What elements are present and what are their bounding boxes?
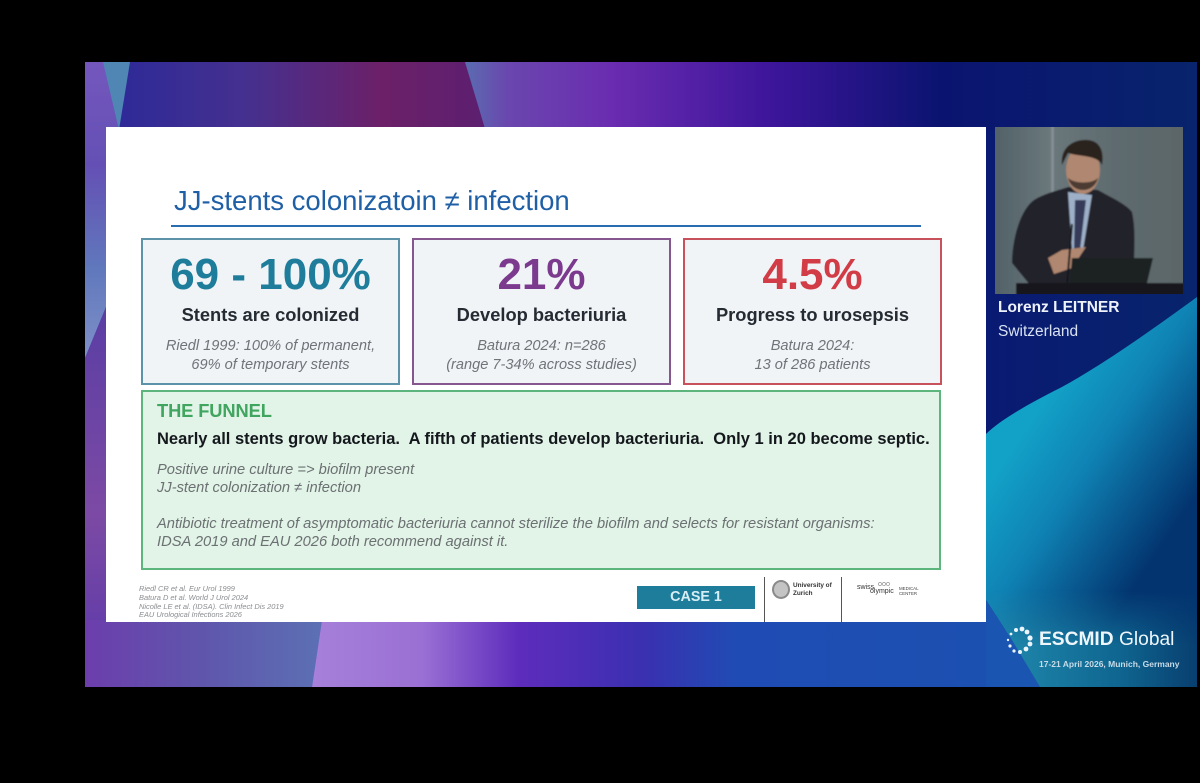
panel: stents colonized: 69% of temporary stents <box>191 356 350 372</box>
funnel note two: Antibiotic treatment of asymptomatic bacteriuria cannot sterilize the biofilm and selects for resistant organisms: <box>157 516 875 532</box>
speaker body <box>1012 187 1134 285</box>
funnel summary: Nearly all stents grow bacteria. A fifth of patients develop bacteriuria. Only 1 in 20 become septic. <box>157 430 930 448</box>
panel: urosepsis: Batura 2024: <box>771 338 854 354</box>
case label <box>637 586 755 609</box>
panel: bacteriuria: (range 7-34% across studies) <box>446 356 637 372</box>
references <box>139 584 284 619</box>
olympic rings <box>878 582 890 586</box>
medical center name <box>899 586 919 596</box>
microphone <box>1067 224 1072 285</box>
ESCMID wordmark: ESCMID Global <box>1039 629 1174 650</box>
laptop <box>1070 258 1153 283</box>
panel: urosepsis: Progress to urosepsis <box>716 304 909 325</box>
speaker country: Switzerland <box>998 323 1078 340</box>
references: EAU Urological Infections 2026 <box>139 610 242 619</box>
slide title: JJ-stents colonizatoin ≠ infection <box>174 185 570 216</box>
funnel note one: JJ-stent colonization ≠ infection <box>157 480 361 496</box>
panel: bacteriuria: Batura 2024: n=286 <box>477 338 606 354</box>
speaker head <box>1066 146 1100 194</box>
panel: bacteriuria: Develop bacteriuria <box>457 304 626 325</box>
conference backdrop <box>85 62 1197 687</box>
funnel note two: IDSA 2019 and EAU 2026 both recommend against it. <box>157 534 508 550</box>
conference date and place: 17-21 April 2026, Munich, Germany <box>1039 659 1179 669</box>
case label: CASE 1 <box>670 589 722 605</box>
left strip <box>85 62 119 358</box>
funnel note two <box>156 516 875 550</box>
logo: University of Zurich <box>772 580 832 599</box>
olympic name: olympic <box>870 588 894 595</box>
university name <box>793 582 832 596</box>
panel: stents colonized: Stents are colonized <box>182 304 359 325</box>
bottom band <box>85 620 322 687</box>
university name: University of <box>793 582 832 589</box>
icon: university seal <box>772 580 790 599</box>
funnel note one: Positive urine culture => biofilm present <box>157 462 414 478</box>
footer divider left <box>764 577 765 622</box>
lectern <box>1016 283 1188 299</box>
panel: the funnel <box>141 390 941 570</box>
references: Riedl CR et al. Eur Urol 1999 <box>139 584 235 593</box>
references: Nicolle LE et al. (IDSA). Clin Infect Dis 2019 <box>139 602 284 611</box>
panel: urosepsis <box>683 238 942 385</box>
medical center name: MEDICAL <box>899 586 919 591</box>
swiss name: swiss <box>857 584 874 591</box>
top band <box>85 62 485 132</box>
medical center name: CENTER <box>899 591 917 596</box>
footer divider right <box>841 577 842 622</box>
speaker hand <box>1048 247 1086 274</box>
panel: urosepsis: 4.5% <box>762 250 863 299</box>
speaker video <box>995 127 1183 294</box>
logo: Swiss Olympic Medical Center <box>857 582 919 596</box>
references: Batura D et al. World J Urol 2024 <box>139 593 248 602</box>
university name: Zurich <box>793 590 813 596</box>
panel: bacteriuria <box>412 238 671 385</box>
title underline <box>171 225 921 227</box>
speaker shirt and tie <box>1068 192 1092 250</box>
panel: stents colonized <box>141 238 400 385</box>
panel: stents colonized: 69 - 100% <box>170 250 371 299</box>
logo: ESCMID Global <box>1006 626 1180 669</box>
speaker name: Lorenz LEITNER <box>998 299 1119 316</box>
slide panel <box>106 127 986 622</box>
panel: bacteriuria: 21% <box>497 250 586 299</box>
funnel heading: THE FUNNEL <box>157 400 272 421</box>
funnel note one <box>157 462 415 496</box>
panel: stents colonized: Riedl 1999: 100% of permanent, <box>166 338 375 354</box>
icon: ESCMID ring <box>1006 626 1033 654</box>
right column <box>986 130 1197 630</box>
panel: urosepsis: 13 of 286 patients <box>754 356 871 372</box>
